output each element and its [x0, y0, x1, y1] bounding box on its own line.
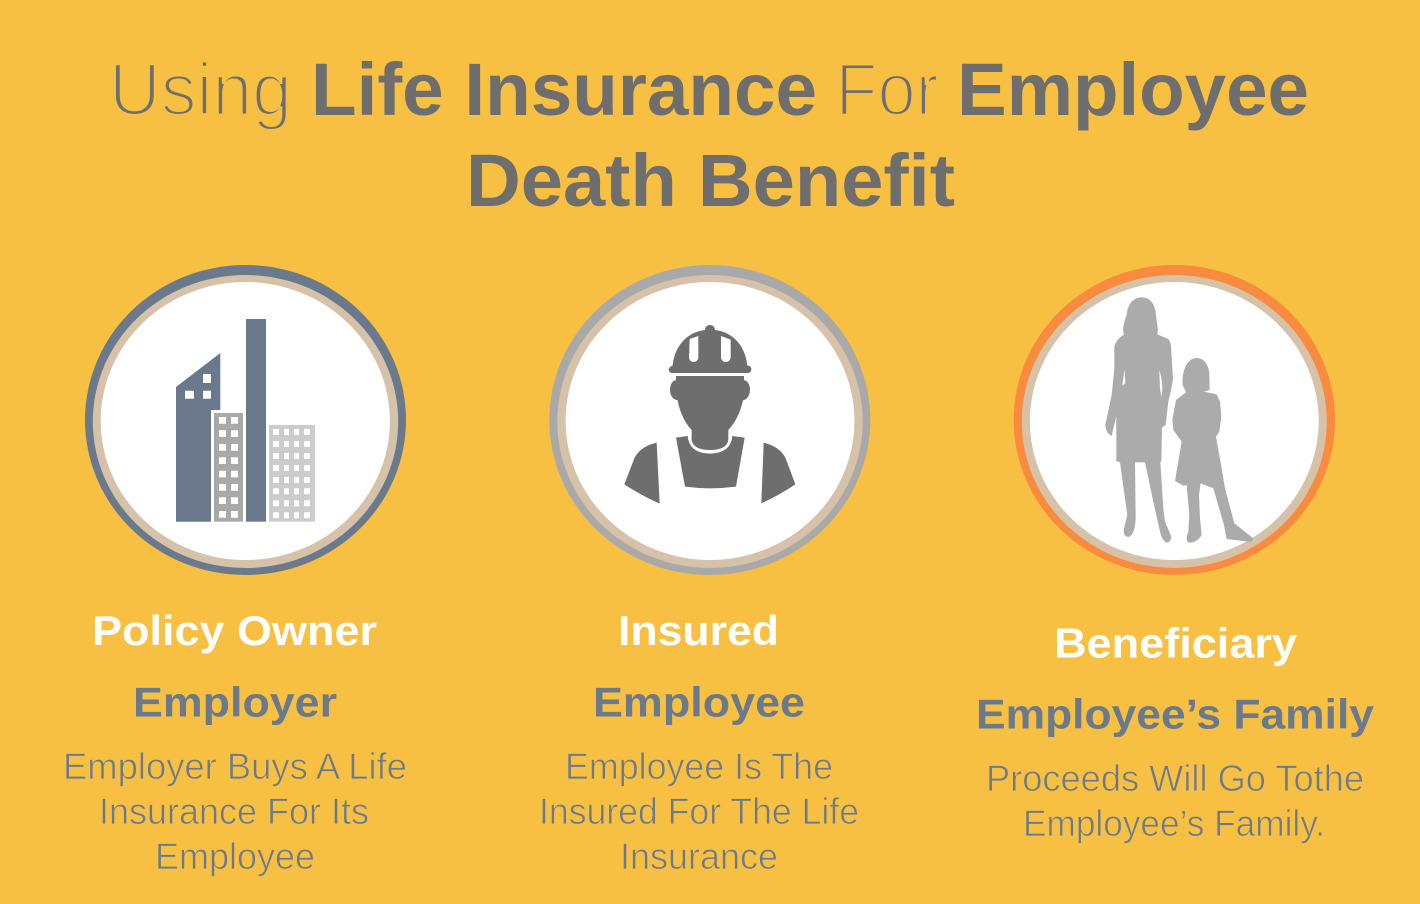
title: Using: [109, 48, 292, 131]
heading: policy owner: Policy Owner: [92, 607, 377, 654]
circle badge: policy owner: [85, 265, 406, 575]
panel: policy owner: [63, 265, 407, 877]
icon: office buildings: [176, 319, 315, 522]
circle badge: beneficiary: [1014, 265, 1335, 575]
description: employee's family: Employee’s Family.: [1023, 803, 1325, 844]
description: employer: [63, 746, 407, 877]
circle badge: insured: [549, 265, 870, 575]
subheading: employee: Employee: [593, 678, 805, 726]
panel: beneficiary: [976, 265, 1375, 844]
description: employee's family: [986, 758, 1364, 844]
panel: insured: [539, 265, 870, 877]
description: employee's family: Proceeds Will Go Tothe: [986, 758, 1364, 799]
icon: construction worker: [624, 325, 795, 504]
description: employer: Employer Buys A Life: [63, 746, 407, 787]
title: For: [836, 48, 938, 131]
icon: mother and child silhouette: [1105, 297, 1253, 542]
description: employee: [539, 746, 859, 877]
heading: insured: Insured: [618, 607, 779, 654]
description: employee: Insurance: [620, 836, 778, 877]
subheading: employer: Employer: [133, 678, 337, 726]
description: employer: Employee: [155, 836, 315, 877]
heading: beneficiary: Beneficiary: [1054, 620, 1298, 666]
description: employee: Employee Is The: [565, 746, 833, 787]
title: Life Insurance: [311, 48, 817, 131]
title: [109, 48, 1309, 222]
description: employer: Insurance For Its: [99, 791, 369, 832]
title: Employee: [957, 48, 1309, 131]
title: Death Benefit: [466, 139, 955, 222]
subheading: employee's family: Employee’s Family: [976, 690, 1375, 738]
description: employee: Insured For The Life: [539, 791, 859, 832]
